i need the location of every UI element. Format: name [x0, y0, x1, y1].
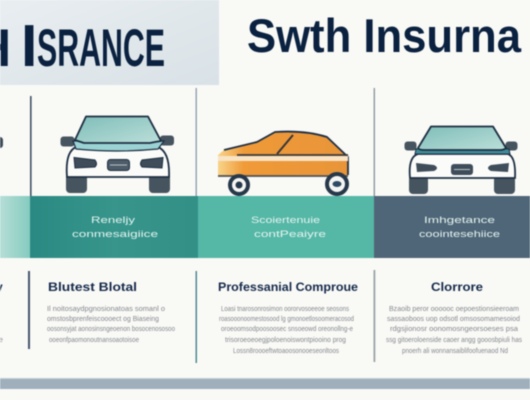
column 2 body: trisoroeoeoegjpoloenoiswontpiooino prog	[225, 335, 346, 344]
column 3 body: sassaoboos uop odsotl omsosomamesoiod	[387, 314, 520, 323]
column 3 body: rdgsjionosr oonomosngeorsoeses psa	[390, 324, 519, 333]
column 3 body: pnoerh ali wonnansaiblifoofuenaod Nd	[402, 346, 508, 355]
column 1 text	[47, 280, 175, 344]
column 3 text	[386, 280, 522, 355]
column 2 body: Lossn8roooeftwtoaoosonooeseonltoos	[233, 346, 339, 355]
column 3 heading: Clorrore	[431, 280, 483, 294]
band segment 2: contPeaiyre	[254, 229, 326, 240]
column 2 body: oroeoomsodpoosoosec snsoeowd oreonollng-e	[221, 324, 353, 333]
band segment 2: Scoiertenuie	[251, 215, 320, 226]
column 1 heading: Blutest Blotal	[48, 280, 137, 294]
band segment 1: Reneljy	[91, 215, 135, 226]
icon: orange side car	[218, 132, 348, 194]
band segment 1: conmesaigiice	[72, 229, 158, 240]
panel title: I	[21, 13, 37, 79]
footer bar	[0, 378, 530, 389]
clipped text at left edge	[0, 280, 3, 344]
column 2 body: Loasi tnarosonrosimon oororvosoeeoe seosons	[221, 304, 349, 313]
panel title: SRANCE	[37, 19, 165, 78]
band segment 3: coointesehiice	[419, 229, 500, 240]
header panel	[0, 0, 219, 85]
column 2 heading: Professanial Comproue	[218, 280, 358, 294]
column 1 body: oosonsyjat aonosinsngeoenon bosocenososoo	[47, 324, 175, 333]
band segment 2	[198, 196, 374, 258]
column 2 text	[218, 280, 358, 355]
band segment 3: Imhgetance	[424, 215, 495, 226]
column 3 body: Bzaoib peror oooooc oepoestionsieeroam	[389, 304, 519, 313]
column 2 body	[219, 304, 354, 355]
column 1 body	[47, 304, 175, 344]
vertical dividers: upper	[30, 88, 375, 196]
band segment 1	[30, 196, 198, 258]
column 3 body	[386, 304, 522, 355]
panel title	[0, 13, 165, 79]
icon: front car 1	[60, 116, 174, 193]
icon: front car 2	[404, 126, 518, 194]
coloured band	[0, 196, 530, 258]
column 2 body: roasooonoomestosood lg gmonoetlosoomeracosod	[219, 314, 354, 323]
column 1 body: omstosbprenfeiscoooect og Biaseing	[47, 314, 159, 323]
band segment 3	[374, 196, 530, 258]
icon: partial car mirror at left edge	[0, 137, 3, 148]
column 1 body: Il noitosaydpgnosionatoas somanl o	[47, 304, 165, 313]
vertical dividers: lower	[28, 270, 375, 363]
column 1 body: ooeonfpaomonoutnansoaotoisoe	[49, 335, 139, 344]
